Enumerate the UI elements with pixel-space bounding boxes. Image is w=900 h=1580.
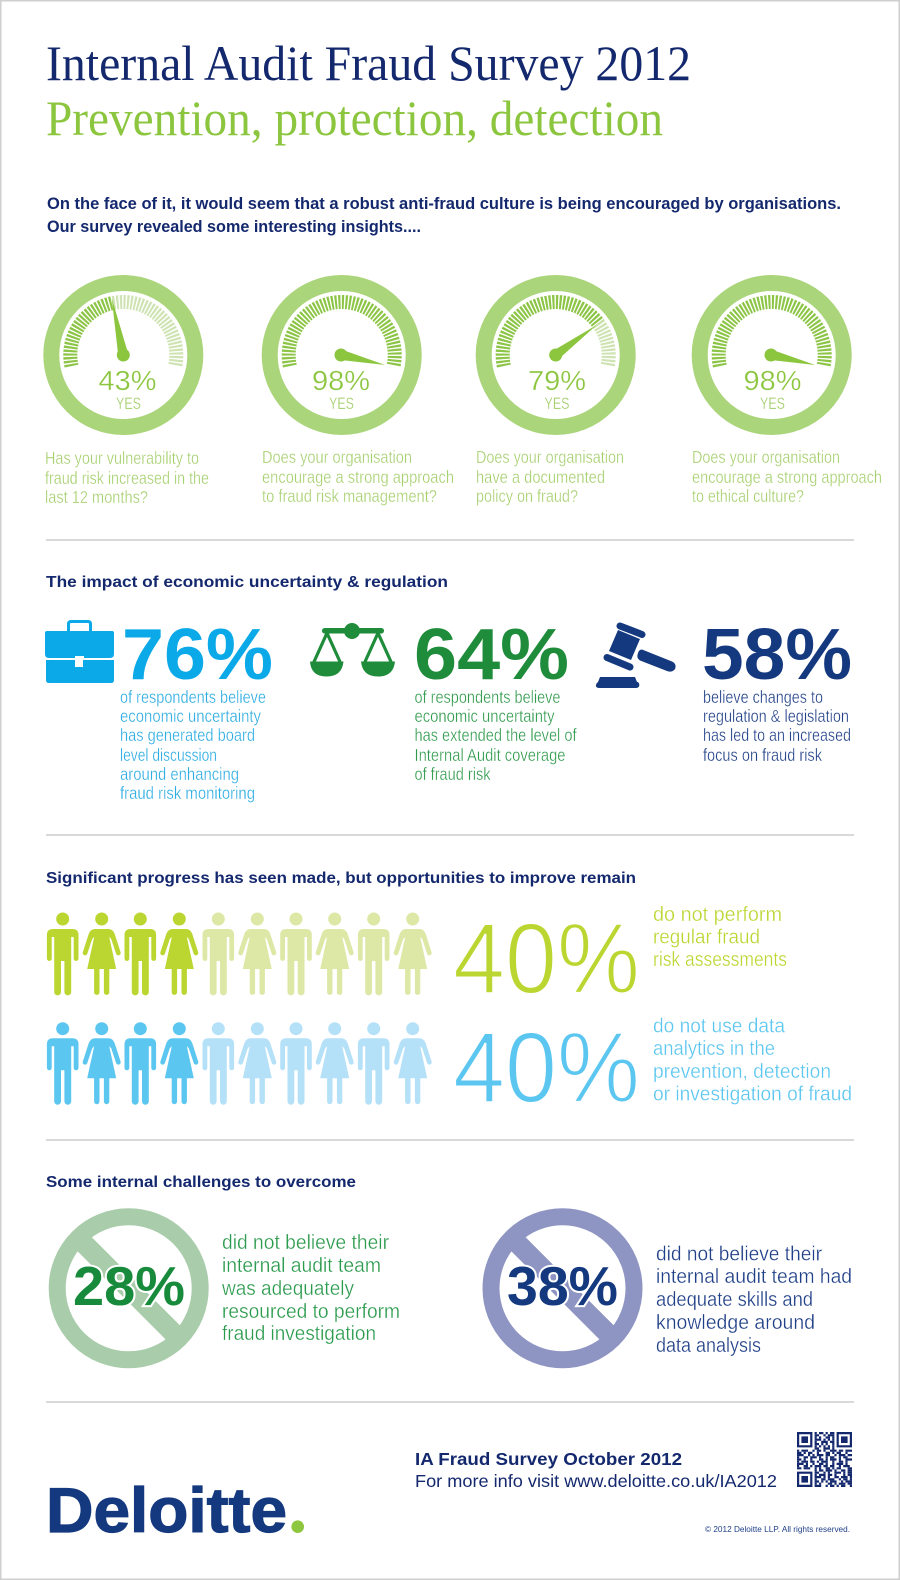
text: 64% description: has extended the level of (414, 725, 577, 745)
stat: 76%: 76% (122, 615, 273, 695)
intro text: On the face of it, it would seem that a robust anti-fraud culture is being encouraged by organisations. (47, 194, 841, 213)
text: 38% description (656, 1243, 852, 1357)
text: 64% description: economic uncertainty (414, 706, 555, 726)
text: 38% description: data analysis (656, 1334, 761, 1357)
question 2: encourage a strong approach (262, 467, 454, 487)
gauge 3: 79% yes: 79% (528, 365, 586, 396)
pictogram: blue people 40% (47, 1022, 432, 1105)
text: 40% blue description (653, 1015, 852, 1106)
footer: survey info (415, 1449, 777, 1491)
question 4: Does your organisation (692, 447, 840, 467)
logo: Deloitte: Deloitte (46, 1476, 287, 1546)
question 2: to fraud risk management? (262, 486, 437, 506)
text: 38% description: knowledge around (656, 1311, 815, 1334)
text: 40% green description (653, 903, 787, 971)
text: 76% description: fraud risk monitoring (120, 783, 255, 803)
text: 40% blue description: analytics in the (653, 1037, 775, 1060)
gauge 1: 43% yes: YES (116, 394, 141, 413)
text: 38% description: did not believe their (656, 1243, 822, 1266)
icon: gavel (596, 626, 676, 688)
gauge 2: 98% yes: 98% (312, 365, 370, 396)
question 2 (262, 447, 454, 506)
text: 58% description: focus on fraud risk (703, 745, 822, 765)
text: 76% description: economic uncertainty (120, 706, 261, 726)
text: 38% description: internal audit team had (656, 1265, 852, 1288)
copyright: © 2012 Deloitte LLP. All rights reserved. (705, 1525, 850, 1534)
question 4: to ethical culture? (692, 486, 804, 506)
footer: survey info: For more info visit www.deloitte.co.uk/IA2012 (415, 1471, 777, 1491)
text: 76% description: around enhancing (120, 764, 239, 784)
heading: economic uncertainty: The impact of economic uncertainty & regulation (46, 574, 448, 591)
text: 28% description: internal audit team (222, 1254, 381, 1277)
question 3 (476, 447, 624, 506)
prohibition sign: 38% (491, 1217, 634, 1360)
gauge 1: 43% yes: 43% (98, 365, 156, 396)
text: 40% blue description: do not use data (653, 1015, 786, 1038)
heading: progress: Significant progress has seen made, but opportunities to improve remain (46, 870, 636, 887)
title (46, 35, 691, 146)
text: 76% description: level discussion (120, 745, 217, 765)
icon: briefcase (45, 620, 114, 683)
intro text: Our survey revealed some interesting insights.... (47, 217, 421, 236)
text: 28% description: was adequately (221, 1277, 355, 1300)
question 1: fraud risk increased in the (45, 468, 209, 488)
text: 40% blue description: or investigation of fraud (653, 1083, 852, 1106)
text: 28% description (221, 1231, 400, 1345)
prohibition sign: 28%: 28% (73, 1255, 185, 1317)
gauge 2: 98% yes (270, 283, 414, 427)
prohibition sign: 28% (57, 1217, 200, 1360)
text: 28% description: did not believe their (222, 1231, 389, 1254)
footer: survey info: IA Fraud Survey October 2012 (415, 1449, 682, 1469)
question 1: last 12 months? (45, 487, 148, 507)
prohibition sign: 38%: 38% (507, 1255, 618, 1317)
text: 76% description (120, 687, 266, 803)
title: Prevention, protection, detection (46, 90, 663, 146)
gauge 4: 98% yes: YES (760, 394, 785, 413)
text: 64% description (414, 687, 577, 784)
icon: scales (310, 623, 395, 676)
gauge 3: 79% yes: YES (544, 394, 570, 413)
intro text (47, 194, 841, 236)
gauge 4: 98% yes (700, 283, 844, 427)
question 3: policy on fraud? (476, 486, 578, 506)
question 3: have a documented (476, 467, 605, 487)
stat: 58%: 58% (702, 615, 852, 695)
heading: challenges: Some internal challenges to overcome (46, 1174, 356, 1191)
text: 64% description: of respondents believe (414, 687, 560, 707)
gauge 1: 43% yes (51, 283, 195, 427)
gauge 4: 98% yes: 98% (744, 365, 802, 396)
text: 64% description: Internal Audit coverage (414, 745, 566, 765)
question 2: Does your organisation (262, 447, 412, 467)
text: 28% description: resourced to perform (222, 1300, 400, 1323)
question 1 (45, 448, 209, 507)
text: 58% description: has led to an increased (703, 725, 851, 745)
stat: 40% blue: 40% (453, 1012, 640, 1124)
text: 58% description: regulation & legislation (703, 706, 849, 726)
icon: QR code (797, 1432, 852, 1487)
text: 38% description: adequate skills and (656, 1288, 813, 1311)
question 1: Has your vulnerability to (45, 448, 199, 468)
text: 64% description: of fraud risk (414, 764, 491, 784)
text: 76% description: has generated board (120, 725, 255, 745)
text: 40% green description: do not perform (653, 903, 782, 926)
gauge 2: 98% yes: YES (329, 394, 354, 413)
text: 58% description: believe changes to (703, 687, 823, 707)
gauge 3: 79% yes (484, 283, 628, 427)
text: 40% green description: risk assessments (653, 948, 787, 971)
text: 40% blue description: prevention, detection (653, 1060, 831, 1083)
text: 58% description (703, 687, 851, 765)
stat: 40% green: 40% (453, 903, 640, 1015)
stat: 64%: 64% (414, 615, 569, 695)
question 4 (692, 447, 882, 506)
title: Internal Audit Fraud Survey 2012 (46, 35, 691, 91)
text: 28% description: fraud investigation (222, 1322, 376, 1345)
text: 40% green description: regular fraud (653, 926, 760, 948)
text: 76% description: of respondents believe (120, 687, 266, 707)
question 3: Does your organisation (476, 447, 624, 467)
pictogram: green people 40% (47, 912, 432, 995)
